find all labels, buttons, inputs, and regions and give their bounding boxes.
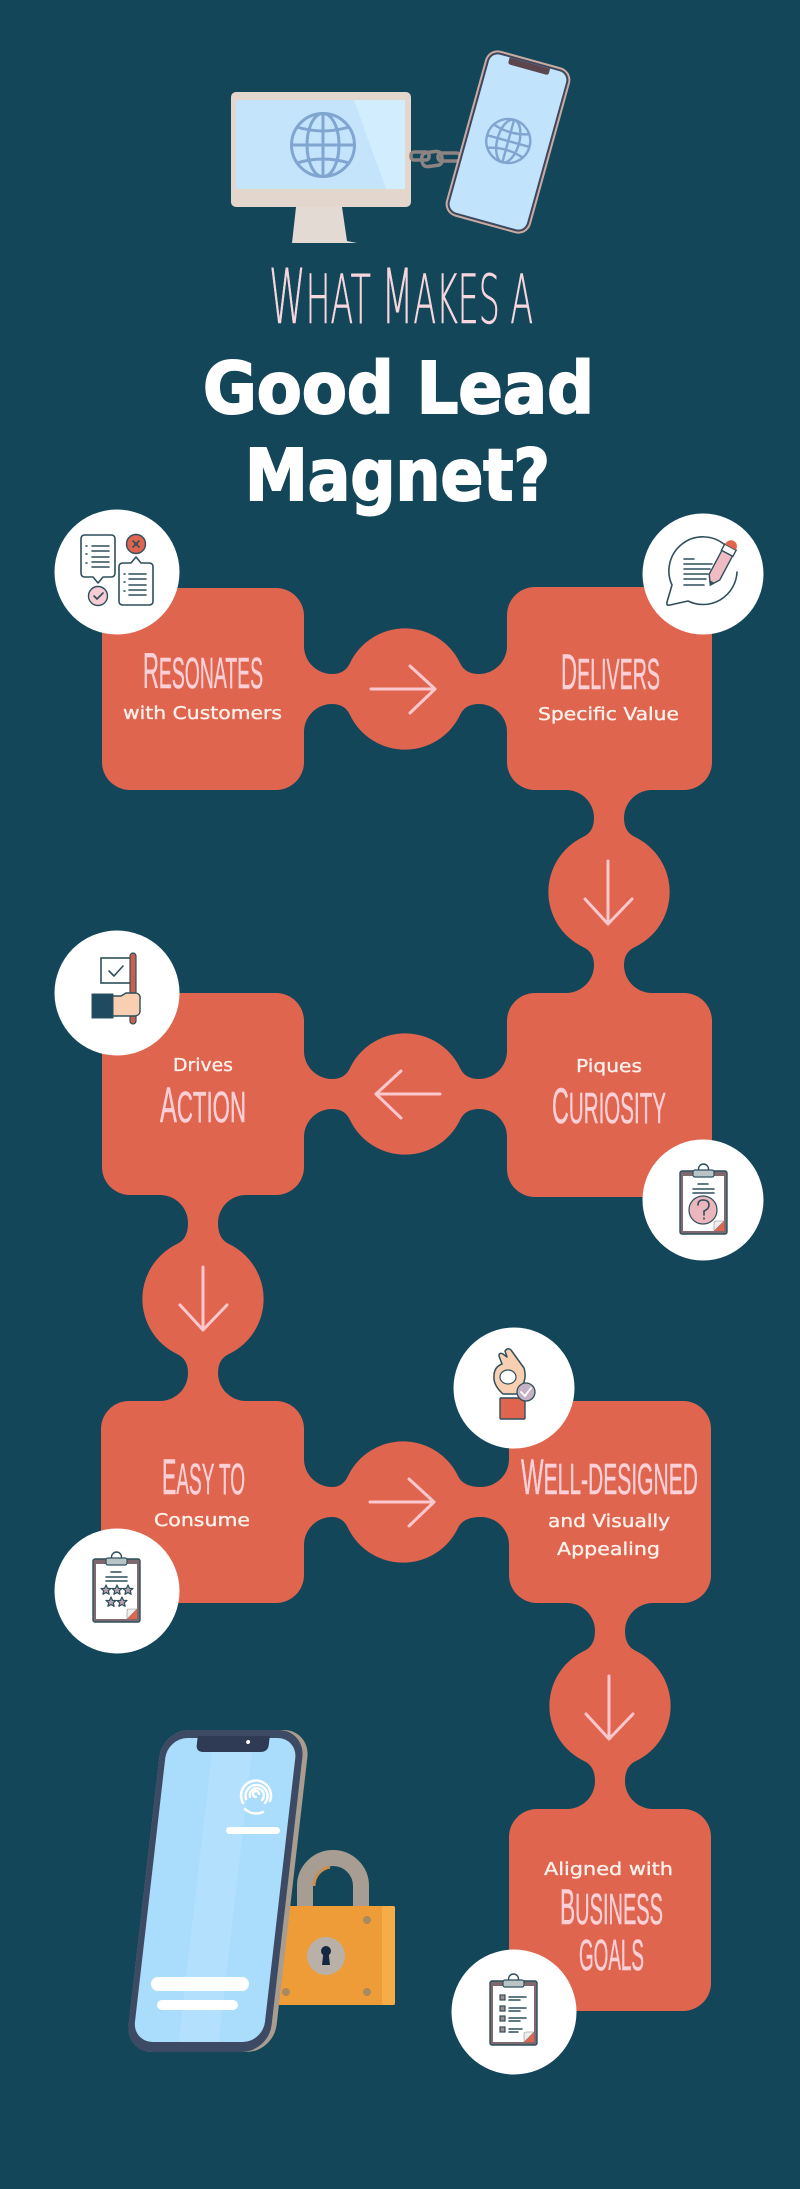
illustration: phone with padlock [126, 1730, 395, 2052]
panel: piques curiosity [507, 993, 764, 1260]
fingerprint [241, 1781, 271, 1814]
icon badge: comparing lists [54, 510, 180, 634]
panel shape [507, 993, 712, 1197]
illustration: monitor chained to phone [231, 47, 573, 243]
icon badge: OK hand gesture [454, 1328, 574, 1448]
panel: resonates with customers [54, 510, 304, 790]
connector with arrow: delivers to curiosity [548, 790, 670, 993]
panel shape [102, 993, 304, 1195]
connector with arrow: resonates to delivers [304, 628, 507, 750]
panel: delivers specific value: DELIVERS [561, 644, 660, 700]
subtext: Consume [154, 1510, 250, 1531]
panel: delivers specific value [507, 514, 764, 790]
panel shape [507, 587, 712, 790]
monitor globe icon [292, 113, 355, 177]
icon badge: clipboard with question [642, 1140, 764, 1260]
connector with arrow: well-designed to business goals [549, 1603, 671, 1809]
panel: aligned with business goals [452, 1809, 711, 2074]
title line: Good Lead: Good Lead [203, 347, 594, 430]
subtext: Drives [173, 1055, 233, 1076]
connector with arrow: curiosity to action [304, 1033, 507, 1155]
subtext: with Customers [123, 703, 282, 724]
panel shape [102, 588, 304, 790]
padlock shackle [305, 1858, 361, 1908]
icon badge: clipboard with stars [54, 1528, 180, 1654]
icon badge: hand with flag [54, 930, 180, 1056]
monitor screen [236, 100, 405, 189]
panel: aligned with business goals: BUSINESS [560, 1879, 663, 1935]
title line: What Makes a: WHAT MAKES A [269, 252, 533, 341]
panel: easy to consume [54, 1401, 304, 1654]
panel: resonates with customers: RESONATES [143, 643, 263, 699]
monitor stand [292, 207, 357, 243]
icon badge: checklist clipboard [452, 1950, 576, 2074]
connector with arrow: action to easy [142, 1195, 264, 1401]
panel shape [101, 1401, 304, 1603]
panel: aligned with business goals: GOALS [579, 1931, 644, 1980]
subtext: Aligned with [544, 1859, 673, 1880]
title line: Magnet?: Magnet? [245, 434, 550, 517]
phone [443, 47, 573, 237]
panel: drives action [54, 930, 304, 1195]
connector with arrow: easy to well-designed [304, 1441, 509, 1563]
padlock rivets [363, 1916, 371, 1924]
padlock keyhole [307, 1937, 345, 1975]
title [203, 252, 594, 517]
padlock body [270, 1906, 395, 2005]
panel: easy to consume: EASY TO [162, 1449, 245, 1505]
chain [411, 151, 460, 167]
subtext: Appealing [557, 1539, 660, 1560]
panel shape [509, 1401, 711, 1603]
subtext: Piques [576, 1056, 642, 1077]
monitor frame [231, 92, 411, 207]
subtext: Specific Value [538, 704, 679, 725]
icon badge: speech bubble with pencil [642, 514, 764, 634]
heading: ACTION [160, 1077, 246, 1133]
phone body [126, 1730, 310, 2052]
subtext: and Visually [548, 1511, 670, 1532]
screen bars [226, 1827, 280, 1834]
panel: well-designed and visually appealing [454, 1328, 711, 1603]
panel shape [509, 1809, 711, 2011]
heading: CURIOSITY [552, 1078, 666, 1134]
